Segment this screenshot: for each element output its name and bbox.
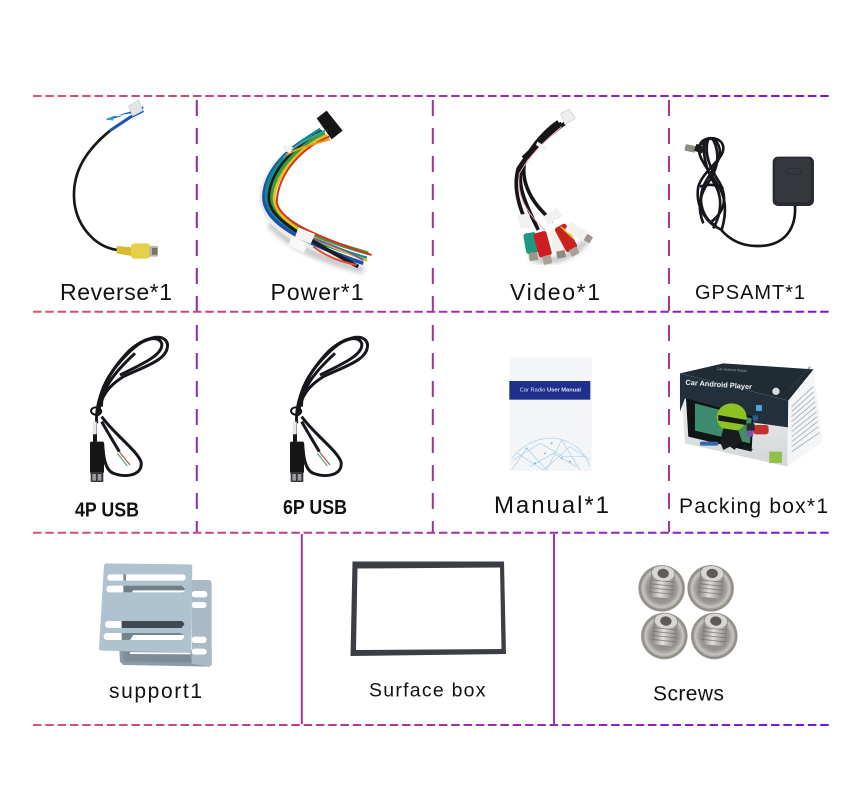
icon: Car Android Player box: Car Android Player xyxy=(685,378,752,391)
panel: Screws xyxy=(636,563,740,706)
panel: GPS antenna xyxy=(684,138,814,304)
panel: Reverse xyxy=(60,100,172,305)
icon: user manual booklet: Car Radio User Manual xyxy=(520,388,582,394)
label: 6P USB: 6P USB xyxy=(283,497,347,519)
icon: Car Android Player box xyxy=(680,363,823,467)
label: Packing box*1: Packing box*1 xyxy=(679,495,828,518)
icon: power wiring harness xyxy=(262,111,372,270)
panel: Surface box xyxy=(350,562,506,702)
icon: 4P USB cable xyxy=(90,337,168,482)
label: Screws: Screws xyxy=(653,682,724,706)
panel: Packing box xyxy=(679,363,828,518)
icon: reverse camera cable xyxy=(74,100,158,259)
icon: RCA video cable xyxy=(516,109,594,266)
panel: Manual xyxy=(494,357,609,519)
icon: GPS antenna with coiled cable xyxy=(684,138,814,246)
icon: Car Android Player box: Car Android Player xyxy=(717,367,748,373)
panel: 6P USB xyxy=(283,337,368,519)
label: Video*1: Video*1 xyxy=(510,279,600,305)
label: support1: support1 xyxy=(109,680,202,703)
label: Surface box: Surface box xyxy=(369,680,486,702)
label: Power*1: Power*1 xyxy=(270,279,364,305)
icon: surface frame xyxy=(350,562,506,656)
label: Manual*1: Manual*1 xyxy=(494,492,609,519)
icon: four screws xyxy=(636,563,740,662)
icon: user manual booklet xyxy=(509,357,592,471)
panel: Video xyxy=(510,109,600,305)
panel: 4P USB xyxy=(75,337,168,522)
icon: 6P USB cable xyxy=(290,337,368,482)
icon: metal support bracket xyxy=(99,563,212,667)
label: Reverse*1: Reverse*1 xyxy=(60,279,172,305)
label: 4P USB: 4P USB xyxy=(75,500,139,522)
icon: Car Android Player box: Car Android Player xyxy=(788,365,812,391)
panel: support xyxy=(99,563,212,703)
label: GPSAMT*1: GPSAMT*1 xyxy=(695,282,805,304)
panel: Power xyxy=(262,111,372,305)
